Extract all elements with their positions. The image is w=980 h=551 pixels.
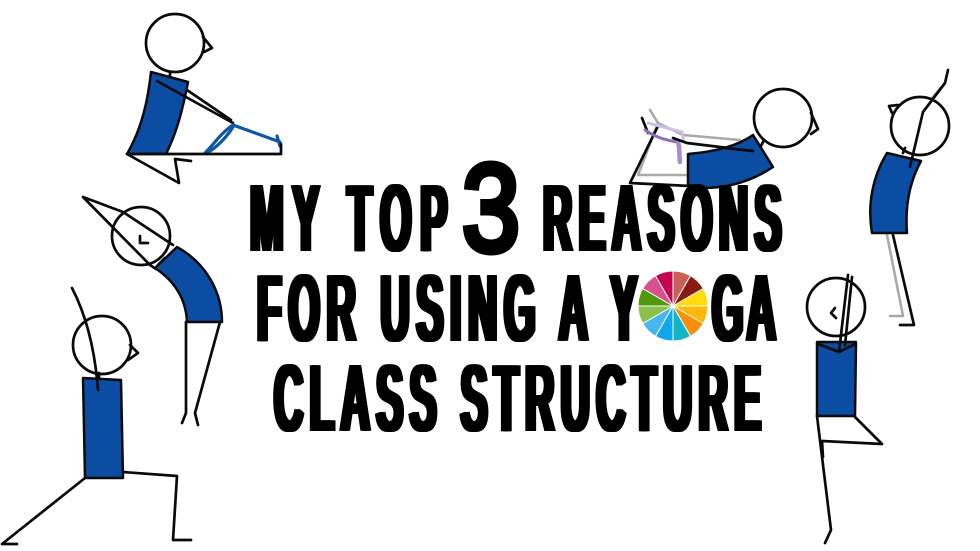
figure: side bend — [83, 197, 222, 425]
figure: standing backbend — [870, 70, 949, 325]
figure: forward bend with purple arms — [630, 89, 818, 188]
figure: seated forward fold — [127, 14, 281, 183]
title line 2 right: GA — [712, 255, 779, 362]
figure: warrior pose — [2, 288, 191, 544]
title line 2 left: FOR USING A Y — [257, 255, 644, 362]
figure: tree pose — [807, 275, 882, 543]
title line 1 right: REASONS — [543, 165, 788, 272]
brush numeral 3: 3 — [462, 140, 520, 278]
colour wheel letter O — [638, 271, 708, 341]
title line 1 left: MY TOP — [250, 165, 456, 272]
title line 3: CLASS STRUCTURE — [274, 345, 768, 452]
